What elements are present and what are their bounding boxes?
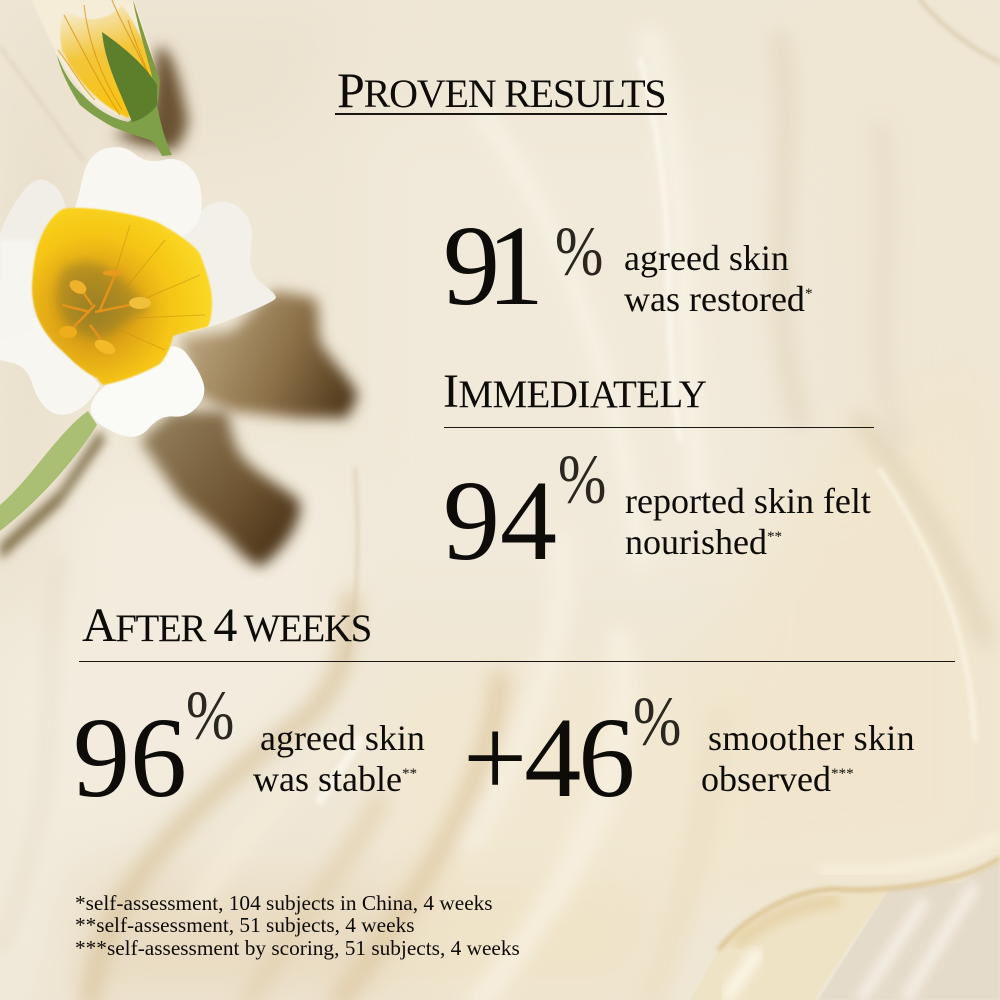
petal veins xyxy=(110,225,205,350)
stat: +46% smoother skin observed: % xyxy=(633,682,681,760)
bud lower sepal xyxy=(57,55,172,156)
stamens xyxy=(59,270,151,357)
stat: 96% agreed skin was stable: 96 xyxy=(73,694,187,821)
icon: stem xyxy=(0,411,97,531)
footnotes: ***self-assessment by scoring, 51 subjects, 4 weeks xyxy=(75,936,520,960)
heading: after 4 weeks: AFTER 4 WEEKS xyxy=(82,599,371,652)
flower shadow xyxy=(0,47,358,567)
stat: 91% agreed skin was restored xyxy=(443,202,812,329)
stat: 96% agreed skin was stable xyxy=(73,676,425,821)
stat: 94% reported skin felt nourished: reported skin felt xyxy=(625,481,871,521)
icon: bud xyxy=(32,0,172,156)
heading: immediately: IMMEDIATELY xyxy=(443,365,706,418)
sharp highlights and creases xyxy=(0,0,1000,800)
icon: open flower xyxy=(0,147,276,437)
stat: 96% agreed skin was stable: agreed skin xyxy=(260,718,425,758)
footnotes: *self-assessment, 104 subjects in China, 4 weeks xyxy=(75,891,493,915)
stat: +46% smoother skin observed: observed*** xyxy=(701,759,854,799)
stat: 94% reported skin felt nourished: % xyxy=(558,440,606,518)
stat: 94% reported skin felt nourished: nourished** xyxy=(625,522,782,562)
stat: 96% agreed skin was stable: was stable** xyxy=(253,759,417,799)
lower right lump xyxy=(690,835,1000,1000)
stat: 94% reported skin felt nourished: 94 xyxy=(443,457,557,584)
stat: 91% agreed skin was restored: % xyxy=(555,212,603,290)
footnotes: **self-assessment, 51 subjects, 4 weeks xyxy=(75,913,415,937)
stat: 91% agreed skin was restored: was restored* xyxy=(624,279,812,319)
footnotes xyxy=(75,891,520,960)
dark throat xyxy=(57,262,150,337)
stat: +46% smoother skin observed xyxy=(463,682,915,821)
bud front sepal xyxy=(102,32,157,122)
title: PROVEN RESULTS xyxy=(337,62,665,118)
stat: 91% agreed skin was restored: agreed skin xyxy=(624,238,789,278)
stat: +46% smoother skin observed: smoother skin xyxy=(708,718,915,758)
bud stripes xyxy=(58,0,153,115)
bud petals xyxy=(32,0,157,118)
stat: 91% agreed skin was restored: 91 xyxy=(443,202,531,329)
stat: 96% agreed skin was stable: % xyxy=(186,676,234,754)
stat: 94% reported skin felt nourished xyxy=(443,440,871,584)
stat: +46% smoother skin observed: +46 xyxy=(463,694,632,821)
yellow center xyxy=(32,208,212,385)
